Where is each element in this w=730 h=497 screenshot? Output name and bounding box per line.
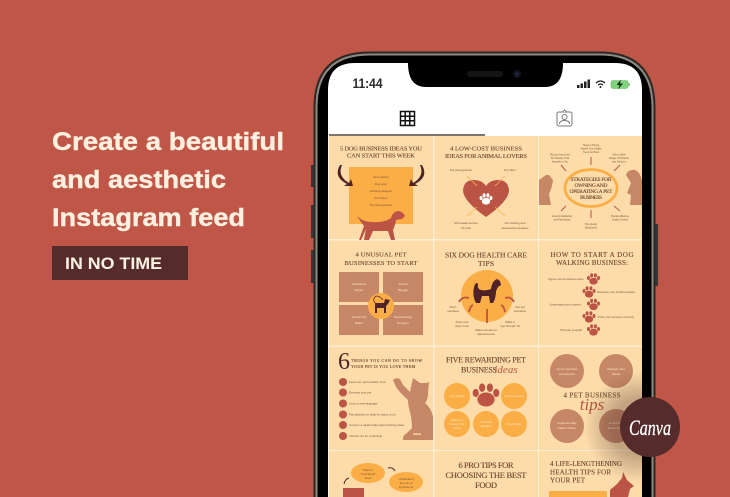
post 8: five rewarding ideas xyxy=(444,356,527,437)
canva shadow xyxy=(588,375,642,479)
post 3: strategies: Invest in Marketing xyxy=(552,215,573,218)
post 10: partial ellipses: "Functional" xyxy=(360,472,376,476)
post 7: six things: Exercise your pet xyxy=(349,390,372,394)
post 12: life-lengthening tips: HEALTH TIPS FOR xyxy=(550,468,611,476)
post 11: pro tips: CHOOSING THE BEST xyxy=(446,470,527,480)
post 8: five rewarding ideas: BUSINESS xyxy=(461,366,497,374)
post 4: unusual pet businesses: Designer xyxy=(397,321,409,325)
post 2: low-cost ideas: accessories designer xyxy=(501,226,529,230)
tab icon: tagged xyxy=(557,110,572,126)
post 4: unusual pet businesses: Expert xyxy=(355,288,364,292)
post 3: strategies: Pet Industry That xyxy=(551,157,569,160)
phone side buttons xyxy=(311,165,658,286)
post 7: six things: Pay attention to what he wants to do xyxy=(349,412,396,416)
post 3: strategies: BUSINESS xyxy=(580,195,602,201)
post 4: unusual pet businesses: BUSINESSES TO START xyxy=(344,260,418,267)
post 6: dog walking business xyxy=(548,251,636,336)
post 5: six dog health care tips: "pet first aid" kit xyxy=(500,324,520,328)
post 2: low-cost ideas: 4 LOW-COST BUSINESS xyxy=(450,146,522,152)
post 7: six things: Learn a new language xyxy=(349,402,378,406)
post 10: partial ellipses: the List of xyxy=(400,481,412,485)
post 1: dog business ideas: Yard cleaner xyxy=(373,175,389,179)
post 1: dog business ideas: Pet photographer xyxy=(370,203,392,207)
feed grid xyxy=(328,136,642,497)
post 2: low-cost ideas: Gift basket service xyxy=(454,221,478,225)
headline: Create a beautiful xyxy=(52,128,284,156)
active tab underline xyxy=(329,134,485,136)
post 5: six dog health care tips: Get pet xyxy=(515,305,525,309)
post 5: six dog health care tips: overfeed xyxy=(447,309,459,313)
post 5: six dog health care tips: Make annual vet xyxy=(475,328,497,332)
post 10: partial ellipses: Ingredients xyxy=(399,485,414,489)
post 2: low-cost ideas: IDEAS FOR ANIMAL LOVERS xyxy=(445,153,527,160)
post 3: strategies: Pick an Area of the xyxy=(550,154,571,156)
post 8: five rewarding ideas: Dog Sitting xyxy=(450,394,465,398)
post 6: dog walking business: WALKING BUSINESS: xyxy=(556,259,628,267)
post 3: strategies: Quality Control xyxy=(612,218,628,222)
post 3: strategies xyxy=(539,144,642,230)
post 3: strategies: OWNING AND xyxy=(574,183,608,189)
post 12: life-lengthening tips xyxy=(549,460,634,497)
post 4: unusual pet businesses: Animal Toy xyxy=(352,315,367,319)
post 1: dog business ideas: Pet trainer xyxy=(374,196,388,200)
post 7: six things: YOUR PET IS YOU LOVE THEM xyxy=(351,364,415,369)
post 6: dog walking business: Structure your small business xyxy=(597,290,636,294)
post 9: pet business tips: 4 PET BUSINESS xyxy=(564,392,621,400)
post 5: six dog health care tips xyxy=(445,250,527,336)
post 8: five rewarding ideas: Bakery & xyxy=(451,418,463,422)
post 3: strategies: Practice Effective xyxy=(611,215,630,218)
post 3: strategies: Offer a Wide xyxy=(612,154,626,156)
post 3: strategies: Trend Go Blind xyxy=(583,151,600,154)
post 5: six dog health care tips: insurance xyxy=(514,309,527,313)
post 3: strategies: and Services xyxy=(612,160,627,164)
post 2: low-cost ideas: Pet sitter xyxy=(504,168,516,172)
post 7: six things: 6 xyxy=(338,349,350,375)
post 11: pro tips xyxy=(446,460,527,490)
post 2: low-cost ideas: for pets xyxy=(461,226,471,230)
post 8: five rewarding ideas: Supplier xyxy=(480,424,492,428)
post 3: strategies: Range of Products xyxy=(609,157,630,160)
screen xyxy=(328,63,642,497)
post 9: pet business tips: Measure Out xyxy=(607,367,625,371)
post 8: five rewarding ideas: Dog Grooming xyxy=(504,394,524,398)
post 5: six dog health care tips: Make a xyxy=(505,320,515,324)
post 9: pet business tips: Environment xyxy=(608,426,625,430)
post 3: strategies: STRATEGIES FOR xyxy=(570,177,612,183)
post 9: pet business tips: Accessories xyxy=(559,372,576,376)
post 10: partial ellipses: Select a xyxy=(363,468,374,472)
post 5: six dog health care tips: Don't xyxy=(450,305,457,309)
post 5: six dog health care tips: Trust your xyxy=(456,320,468,324)
post 7: six things: Feed your pet's healthy food xyxy=(349,380,386,384)
post 3: strategies: OPERATING A PET xyxy=(570,189,613,195)
post 1: dog business ideas xyxy=(338,146,424,240)
post 8: five rewarding ideas: ideas xyxy=(494,364,518,376)
badge: in no time: IN NO TIME xyxy=(65,254,162,273)
post 9: pet business tips: Meals xyxy=(612,372,620,376)
badge: in no time xyxy=(52,246,188,280)
tab icon: grid xyxy=(400,112,414,126)
status time: 11:44 xyxy=(352,76,383,91)
post 3: strategies: Employees xyxy=(585,226,598,230)
post 1: dog business ideas: Clothing designer xyxy=(370,189,392,193)
grid backdrop xyxy=(328,136,642,497)
post 6: dog walking business: Promote yourself xyxy=(560,328,582,332)
post 7: six things: Invest in a relationship based training class xyxy=(349,423,405,427)
post 12: life-lengthening tips: 4 LIFE-LENGTHENING xyxy=(550,460,622,468)
headline xyxy=(52,128,284,232)
post 5: six dog health care tips: appointments xyxy=(477,332,495,336)
post 3: strategies: Market, Don't Make xyxy=(581,148,602,150)
post tiles xyxy=(329,136,642,497)
phone body xyxy=(314,52,656,497)
post 1: dog business ideas: Dog sitter xyxy=(375,182,387,186)
post 2: low-cost ideas: Pet photographer xyxy=(450,168,472,172)
post 3: strategies: and Promotions xyxy=(554,218,571,222)
headline: and aesthetic xyxy=(52,166,226,194)
post 11: pro tips: FOOD xyxy=(475,480,497,490)
canva badge: Canva xyxy=(629,415,671,440)
post 7: six things: THINGS YOU CAN DO TO SHOW xyxy=(351,358,422,363)
post 9: pet business tips: tips xyxy=(580,395,605,414)
post 5: six dog health care tips: TIPS xyxy=(478,259,494,268)
post 8: five rewarding ideas: Pet Food xyxy=(480,420,492,424)
post 6: dog walking business: Price your services correctly xyxy=(598,315,635,319)
post 4: unusual pet businesses: Blogger xyxy=(398,288,408,292)
post 6: dog walking business: Figure out a business name xyxy=(548,277,584,281)
post 6: dog walking business: HOW TO START A DOG xyxy=(550,251,634,259)
notch camera xyxy=(467,70,521,78)
post 9: pet business tips: Dates Online xyxy=(558,426,576,430)
post 8: five rewarding ideas: Treats xyxy=(453,426,462,430)
phone xyxy=(311,52,658,497)
post 8: five rewarding ideas: FIVE REWARDING PET xyxy=(446,356,526,364)
canva badge xyxy=(620,397,680,457)
post 5: six dog health care tips: SIX DOG HEALTH CARE xyxy=(445,250,527,260)
post 6: dog walking business: Understand your market xyxy=(549,302,581,306)
post 8: five rewarding ideas: Dog Walker xyxy=(506,422,522,426)
post 9: pet business tips xyxy=(550,354,633,443)
post 10: partial ellipses xyxy=(343,463,423,497)
post 4: unusual pet businesses: Animal xyxy=(398,282,408,286)
post 7: six things xyxy=(338,349,433,440)
headline: Instagram feed xyxy=(52,204,245,232)
post 7: six things: Visit the vet for a checkup xyxy=(349,434,382,438)
post 4: unusual pet businesses: Maker xyxy=(355,321,363,325)
post 3: strategies: Hire Quality xyxy=(585,223,598,226)
post 4: unusual pet businesses: Bed/Housing xyxy=(394,315,412,319)
post 9: pet business tips: Organize Play xyxy=(558,421,577,425)
post 9: pet business tips: Enrich Pet xyxy=(609,421,623,425)
post 11: pro tips: 6 PRO TIPS FOR xyxy=(458,460,514,470)
post 10: partial ellipses: Food xyxy=(365,476,372,480)
post 4: unusual pet businesses xyxy=(339,252,423,335)
post 12: life-lengthening tips: YOUR PET xyxy=(550,476,586,484)
post 4: unusual pet businesses: Obedience xyxy=(352,282,367,286)
post 2: low-cost ideas xyxy=(445,146,529,230)
post 3: strategies: Appeals to You xyxy=(552,160,569,164)
post 10: partial ellipses: Understand xyxy=(399,477,414,481)
post 3: strategies: Target a Strong xyxy=(583,144,600,147)
status icons xyxy=(577,80,630,90)
post 5: six dog health care tips: dog's nose xyxy=(455,324,469,328)
post 1: dog business ideas: CAN START THIS WEEK xyxy=(347,152,415,160)
post 9: pet business tips: Go for Exercise xyxy=(557,367,578,371)
post 2: low-cost ideas: Pet clothing and xyxy=(505,221,526,225)
post 4: unusual pet businesses: 4 UNUSUAL PET xyxy=(356,252,407,258)
post 1: dog business ideas: 5 DOG BUSINESS IDEAS YOU xyxy=(340,146,422,152)
post 8: five rewarding ideas: Design Pet xyxy=(450,422,464,426)
